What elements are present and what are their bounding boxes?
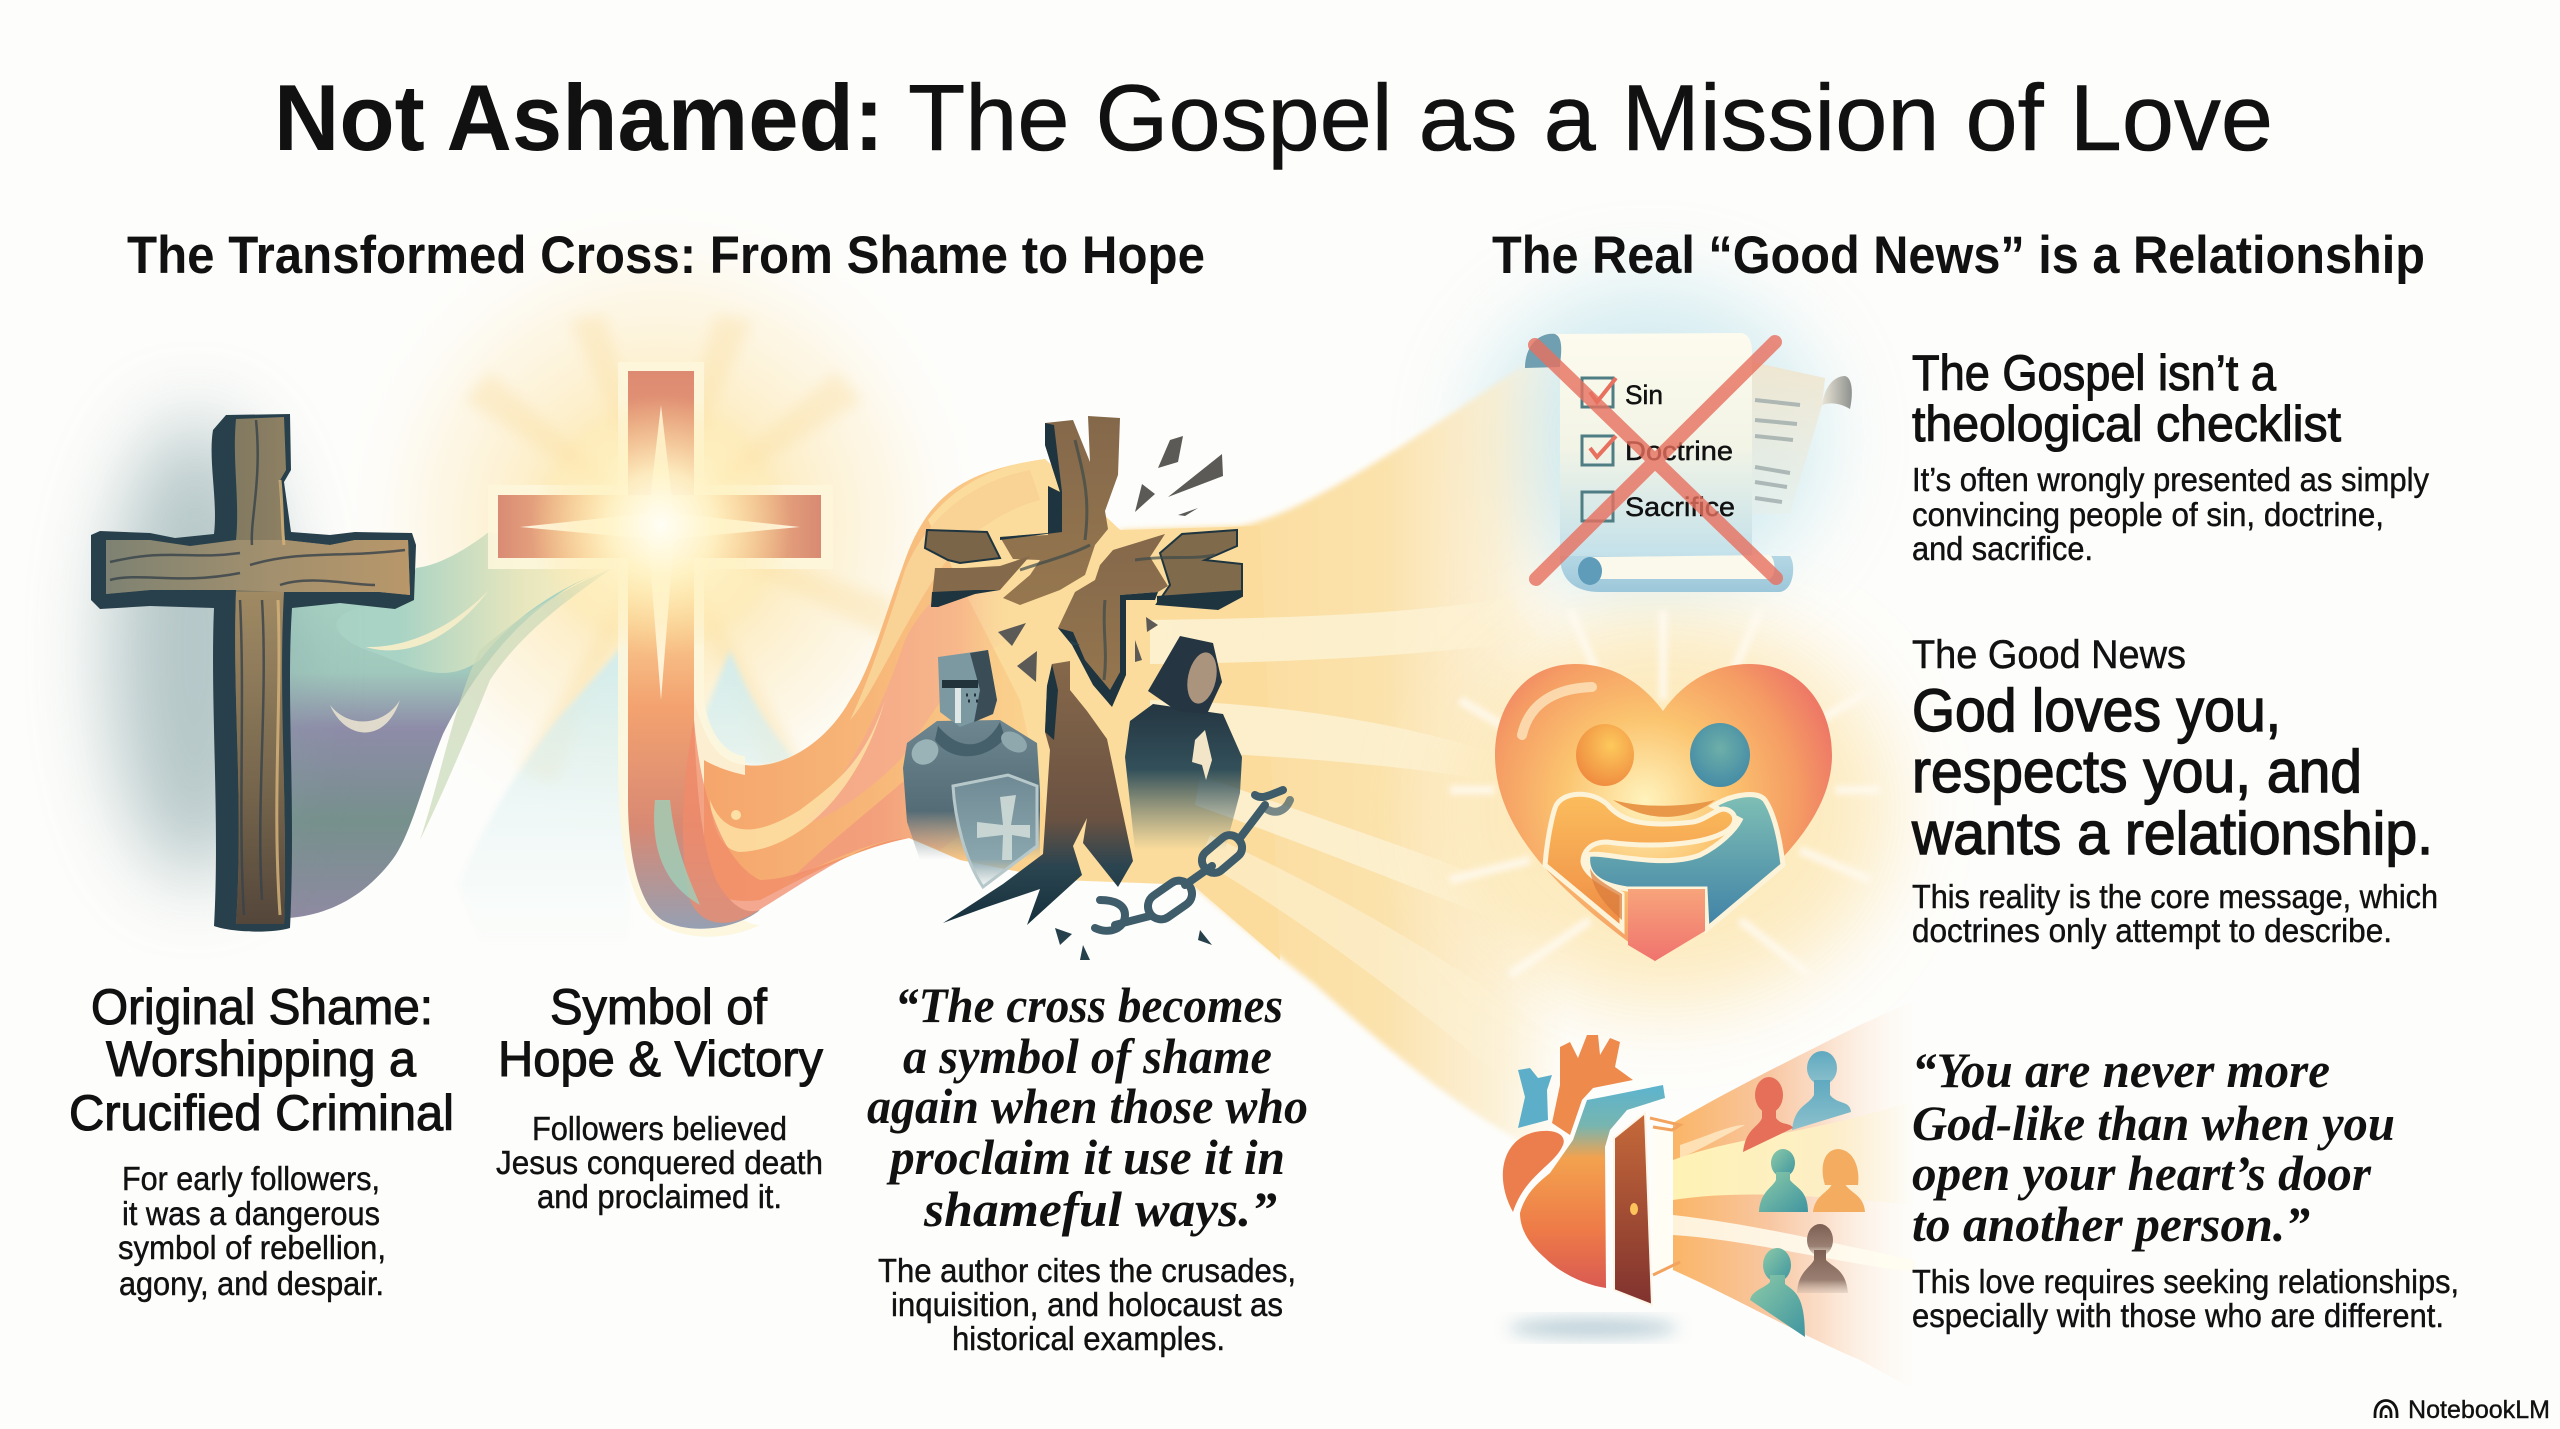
title: The Gospel as a Mission of Love xyxy=(908,65,2273,170)
icon: heart with embracing figures xyxy=(1450,610,1880,975)
text block: original shame: Crucified Criminal xyxy=(69,1085,454,1141)
text block: theological checklist: It’s often wrongly presented as simply xyxy=(1912,461,2429,498)
icon: anatomical heart opening a door to people xyxy=(1503,1000,1915,1390)
pale rays inside golden fan xyxy=(1150,598,1570,1130)
text block: symbol of hope: Followers believed xyxy=(532,1110,787,1147)
text block: shame quote: a symbol of shame xyxy=(903,1028,1272,1084)
text block: symbol of hope: and proclaimed it. xyxy=(537,1178,782,1215)
text block: the good news: God loves you, xyxy=(1912,677,2281,744)
text block: heart's door quote: “You are never more xyxy=(1912,1042,2330,1098)
heading: real good news: The Real “Good News” is a Relationship xyxy=(1492,226,2425,285)
flying shards xyxy=(998,436,1223,682)
text block: symbol of hope xyxy=(496,979,823,1215)
icon: broken cross with knight, monk and chain xyxy=(903,416,1290,960)
heart anatomy xyxy=(1552,1035,1633,1135)
blue halo around checklist xyxy=(1475,285,1825,595)
golden fan of light between panels xyxy=(1100,340,1610,1180)
teal light beneath cross xyxy=(458,640,795,940)
text block: symbol of hope: Jesus conquered death xyxy=(496,1144,823,1181)
text block: theological checklist xyxy=(1912,345,2429,567)
text block: shame quote: inquisition, and holocaust as xyxy=(891,1286,1283,1323)
text block: heart's door quote: open your heart’s door xyxy=(1912,1145,2372,1201)
text block: theological checklist: theological checklist xyxy=(1912,396,2341,452)
text block: original shame: it was a dangerous xyxy=(122,1195,380,1232)
panel: hopeful cross glow and rays xyxy=(331,195,991,940)
hooded monk xyxy=(1125,636,1242,850)
text block: original shame: For early followers, xyxy=(122,1160,380,1197)
warm glow around heart icon xyxy=(1440,615,1890,1005)
icon: luminous cross of hope xyxy=(488,362,909,937)
upper splintered wood xyxy=(925,416,1242,707)
lower trunk with roots xyxy=(943,661,1133,925)
ribbon: shame flowing into hope xyxy=(289,532,611,918)
text block: original shame: agony, and despair. xyxy=(119,1265,384,1302)
text block: original shame: symbol of rebellion, xyxy=(118,1229,386,1266)
text block: shame quote: proclaim it use it in xyxy=(886,1129,1285,1185)
text block: shame quote: “The cross becomes xyxy=(895,977,1283,1033)
text block: theological checklist: The Gospel isn’t a xyxy=(1912,345,2276,401)
title: Not Ashamed: xyxy=(274,65,884,170)
text block: heart's door quote: to another person.” xyxy=(1912,1196,2310,1252)
people xyxy=(1743,1051,1865,1337)
text block: the good news: The Good News xyxy=(1912,633,2186,677)
ribbon: hope flowing to broken cross xyxy=(694,459,1280,960)
helmet xyxy=(938,650,997,727)
icon: crossed-out checklist scroll: Sin xyxy=(1625,380,1663,410)
text block: original shame xyxy=(69,979,454,1302)
text block: heart's door quote xyxy=(1912,1042,2459,1334)
text block: the good news: wants a relationship. xyxy=(1911,800,2433,867)
text block: theological checklist: and sacrifice. xyxy=(1912,530,2093,567)
text block: shame quote xyxy=(867,977,1308,1357)
knight xyxy=(903,650,1040,887)
icon: crossed-out checklist scroll: Sacrifice xyxy=(1625,492,1735,522)
text block: shame quote: again when those who xyxy=(867,1078,1308,1134)
text block: shame quote: The author cites the crusades, xyxy=(878,1252,1296,1289)
icon: crossed-out checklist scroll: Doctrine xyxy=(1625,436,1733,466)
broken chain xyxy=(1095,790,1290,931)
text block: shame quote: historical examples. xyxy=(952,1320,1225,1357)
text block: the good news: This reality is the core message, which xyxy=(1912,878,2438,915)
text block: symbol of hope: Symbol of xyxy=(550,979,767,1035)
text block: shame quote: shameful ways.” xyxy=(923,1181,1277,1237)
text block: the good news: doctrines only attempt to describe. xyxy=(1912,912,2392,949)
text block: original shame: Original Shame: xyxy=(91,979,433,1035)
shield xyxy=(953,775,1037,887)
door xyxy=(1653,1127,1670,1275)
icon: crossed-out checklist scroll xyxy=(1525,333,1852,592)
text block: symbol of hope: Hope & Victory xyxy=(498,1031,823,1087)
text block: original shame: Worshipping a xyxy=(106,1031,416,1087)
NotebookLM logo and wordmark: NotebookLM xyxy=(2408,1396,2550,1424)
text block: heart's door quote: especially with those who are different. xyxy=(1912,1297,2444,1334)
icon: weathered wooden cross of shame xyxy=(91,414,416,932)
heading: transformed cross: The Transformed Cross: From Shame to Hope xyxy=(127,226,1205,285)
text block: the good news xyxy=(1911,633,2438,949)
text block: heart's door quote: This love requires seeking relationships, xyxy=(1912,1263,2459,1300)
text block: theological checklist: convincing people of sin, doctrine, xyxy=(1912,496,2384,533)
text block: the good news: respects you, and xyxy=(1912,738,2362,805)
title xyxy=(274,65,2273,170)
text block: heart's door quote: God-like than when you xyxy=(1912,1095,2395,1151)
